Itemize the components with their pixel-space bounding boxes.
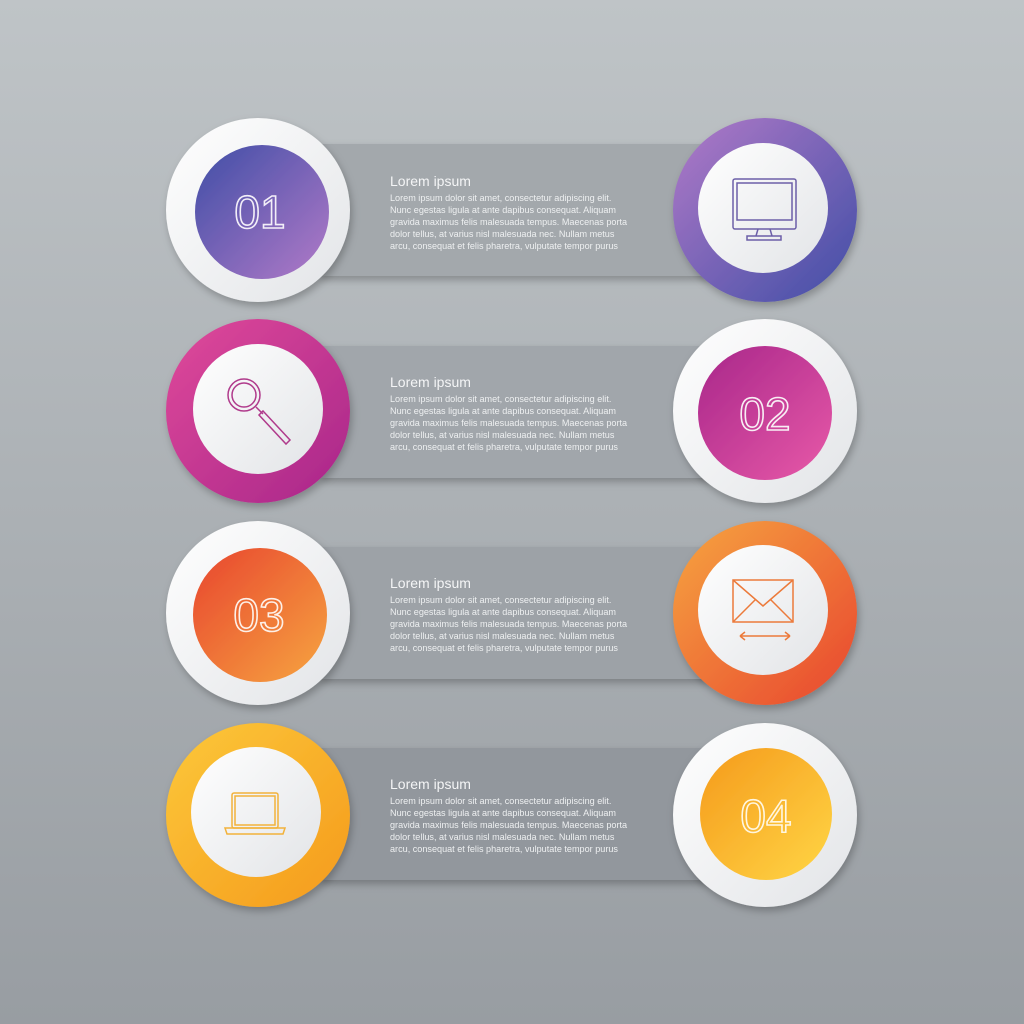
- text block 2: [390, 374, 628, 452]
- row 3: [166, 521, 857, 705]
- text block 1: dolor tellus, at varius nisl malesuada nec. Nullam metus: [390, 229, 615, 239]
- text block 3: Nunc egestas ligula at ante dapibus consequat. Aliquam: [390, 607, 616, 617]
- text block 1: Nunc egestas ligula at ante dapibus consequat. Aliquam: [390, 205, 616, 215]
- band 4: [320, 748, 710, 880]
- text block 4: Lorem ipsum: [390, 776, 471, 792]
- text block 2: arcu, consequat et felis pharetra, vulputate tempor purus: [390, 442, 618, 452]
- number circle 01: [166, 118, 350, 302]
- text block 4: Lorem ipsum dolor sit amet, consectetur adipiscing elit.: [390, 796, 611, 806]
- text block 4: dolor tellus, at varius nisl malesuada nec. Nullam metus: [390, 832, 615, 842]
- band 3: [320, 547, 710, 679]
- icon circle: monitor: [673, 118, 857, 302]
- number circle 01: 01: [234, 186, 286, 238]
- band 1: [320, 144, 710, 276]
- text block 2: Nunc egestas ligula at ante dapibus consequat. Aliquam: [390, 406, 616, 416]
- text block 3: dolor tellus, at varius nisl malesuada nec. Nullam metus: [390, 631, 615, 641]
- text block 4: arcu, consequat et felis pharetra, vulputate tempor purus: [390, 844, 618, 854]
- text block 1: [390, 173, 628, 251]
- icon circle: envelope: [673, 521, 857, 705]
- text block 3: Lorem ipsum: [390, 575, 471, 591]
- text block 3: Lorem ipsum dolor sit amet, consectetur adipiscing elit.: [390, 595, 611, 605]
- number circle 02: [673, 319, 857, 503]
- number circle 03: [166, 521, 350, 705]
- number circle 04: [673, 723, 857, 907]
- text block 1: Lorem ipsum: [390, 173, 471, 189]
- text block 4: Nunc egestas ligula at ante dapibus consequat. Aliquam: [390, 808, 616, 818]
- text block 2: gravida maximus felis malesuada tempus. Maecenas porta: [390, 418, 628, 428]
- text block 3: gravida maximus felis malesuada tempus. Maecenas porta: [390, 619, 628, 629]
- row 4: [166, 723, 857, 907]
- icon circle: laptop: [166, 723, 350, 907]
- row 1: [166, 118, 857, 302]
- icon circle: magnifier: [166, 319, 350, 503]
- number circle 03: 03: [233, 589, 285, 641]
- text block 2: Lorem ipsum dolor sit amet, consectetur adipiscing elit.: [390, 394, 611, 404]
- text block 1: Lorem ipsum dolor sit amet, consectetur adipiscing elit.: [390, 193, 611, 203]
- row 2: [166, 319, 857, 503]
- number circle 02: 02: [739, 388, 791, 440]
- number circle 04: 04: [740, 790, 792, 842]
- text block 3: arcu, consequat et felis pharetra, vulputate tempor purus: [390, 643, 618, 653]
- text block 2: dolor tellus, at varius nisl malesuada nec. Nullam metus: [390, 430, 615, 440]
- text block 1: gravida maximus felis malesuada tempus. Maecenas porta: [390, 217, 628, 227]
- text block 4: [390, 776, 628, 854]
- text block 2: Lorem ipsum: [390, 374, 471, 390]
- text block 3: [390, 575, 628, 653]
- text block 1: arcu, consequat et felis pharetra, vulputate tempor purus: [390, 241, 618, 251]
- band 2: [320, 346, 710, 478]
- text block 4: gravida maximus felis malesuada tempus. Maecenas porta: [390, 820, 628, 830]
